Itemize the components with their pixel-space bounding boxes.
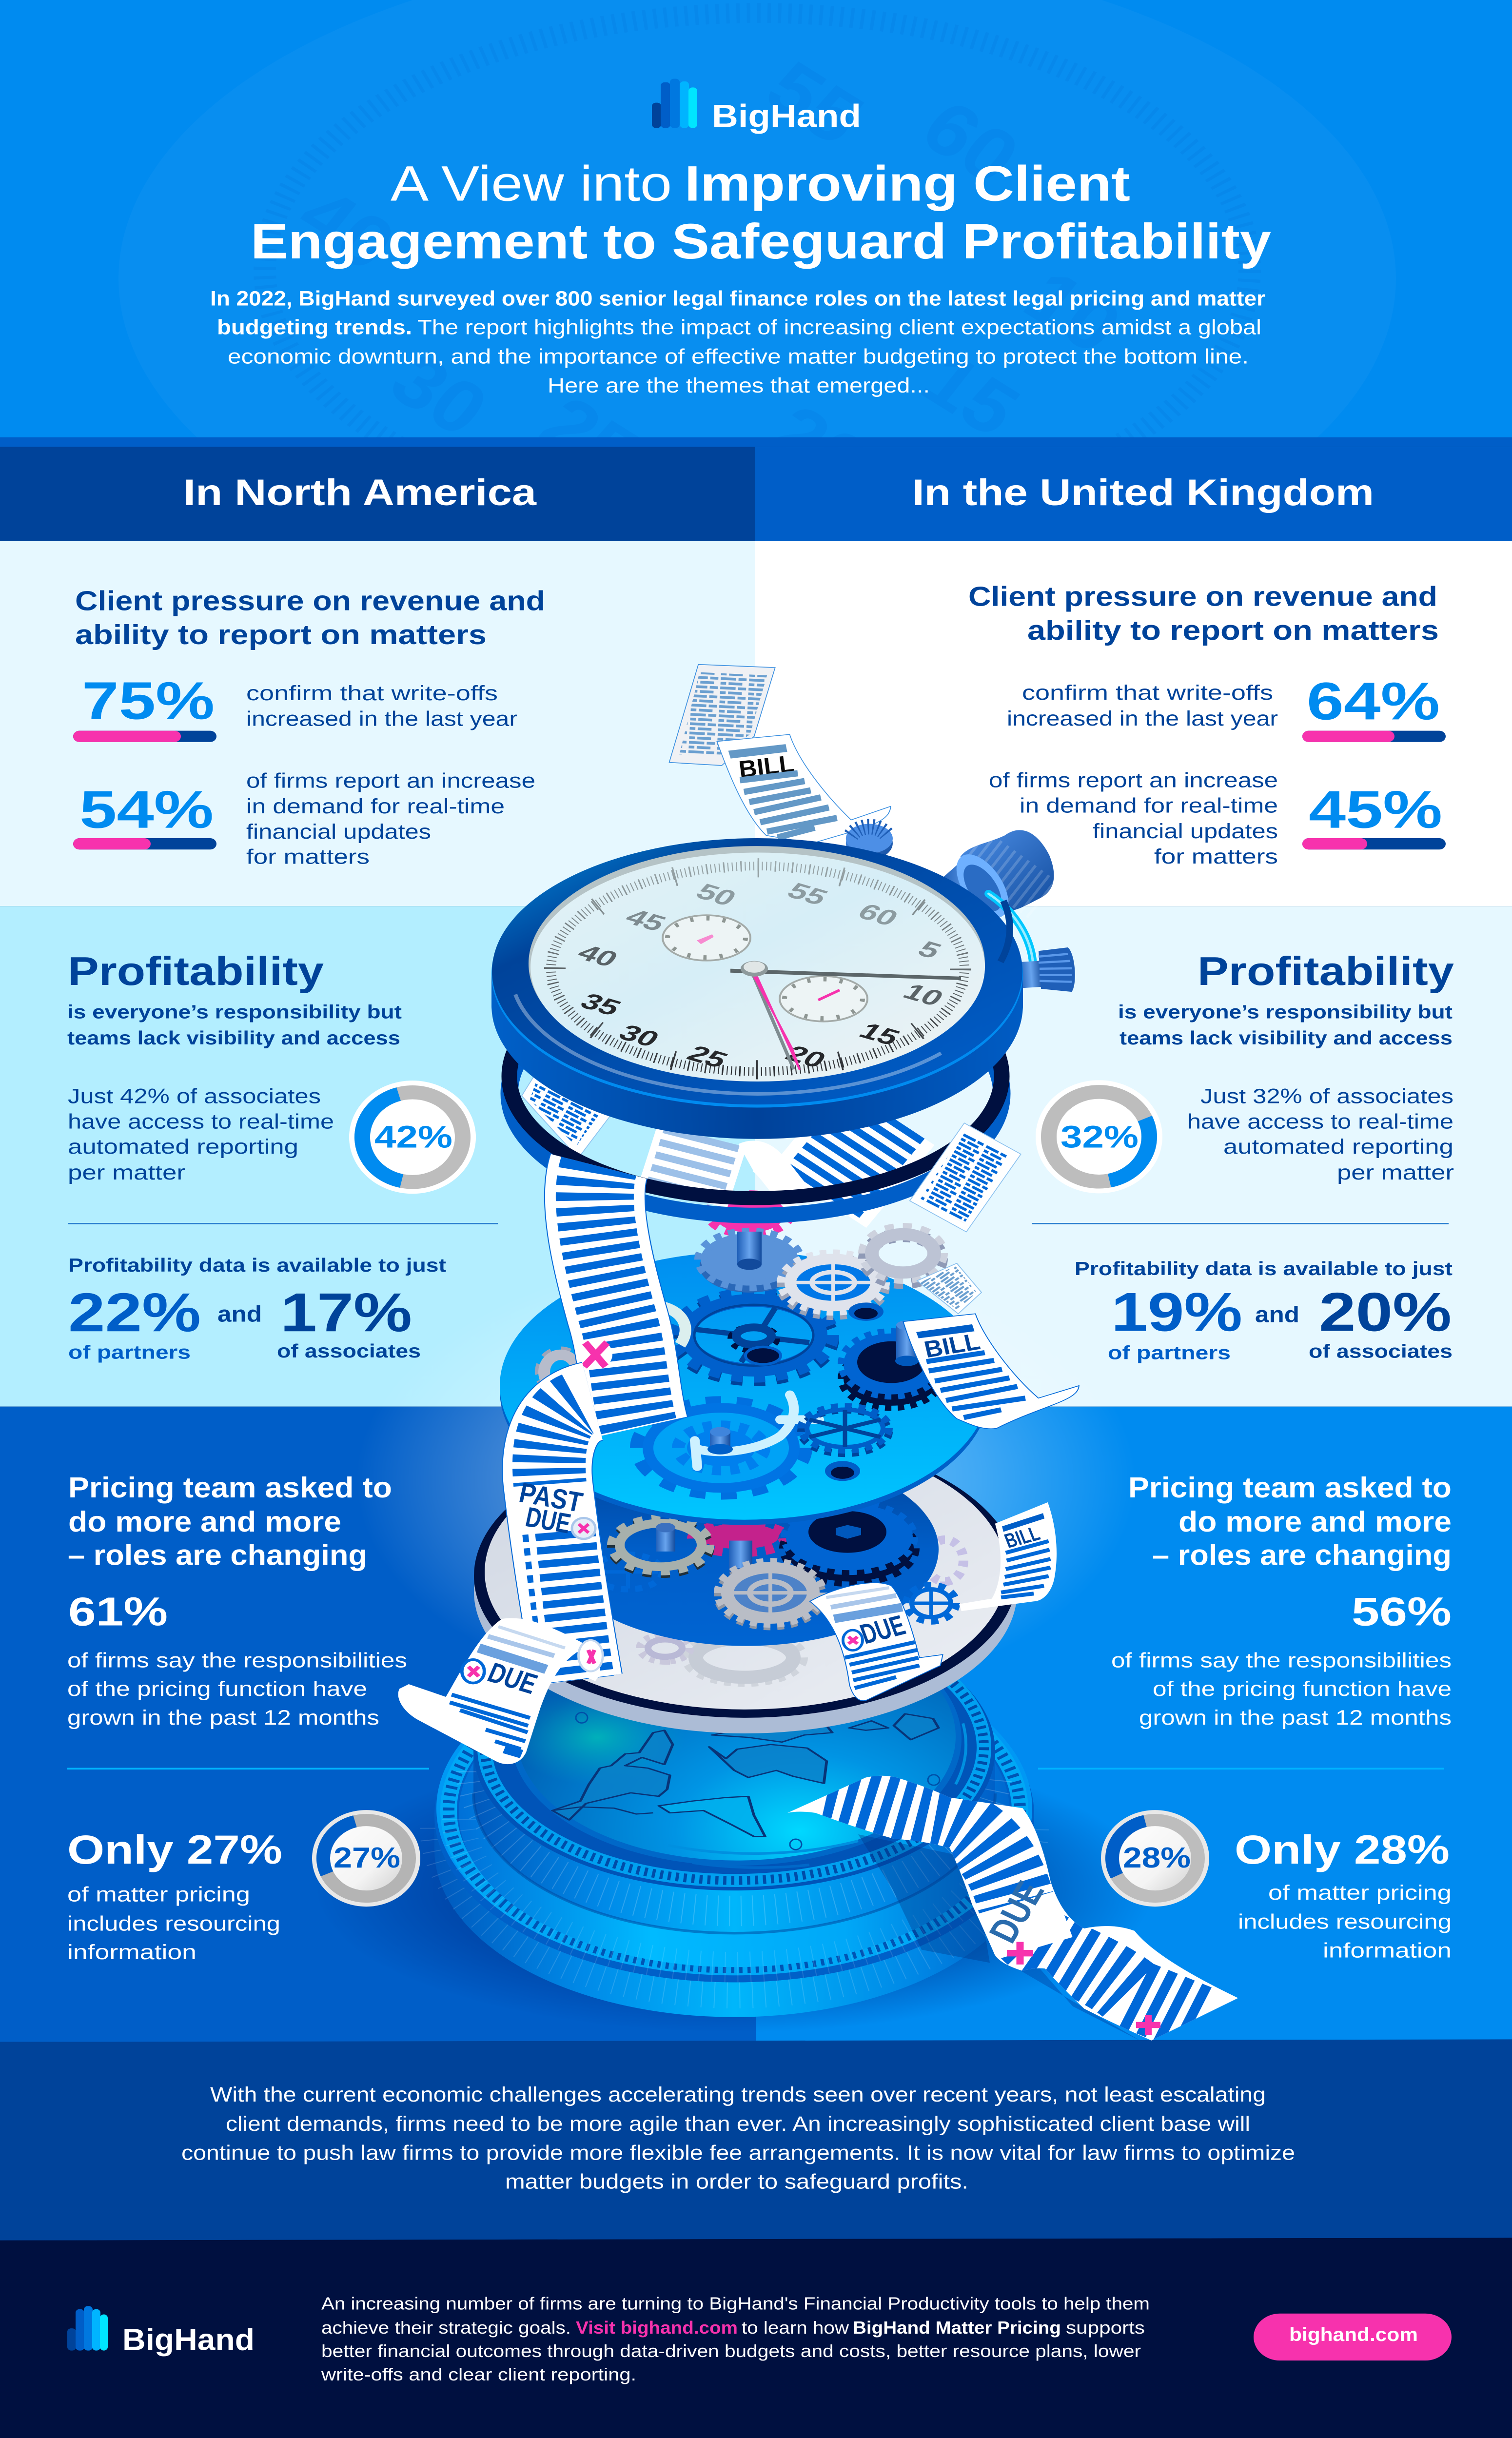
bar 64%: [1302, 731, 1446, 742]
background: header: 20: [755, 390, 884, 504]
stat 19% partners: of partners: [1108, 1342, 1231, 1363]
hole: [848, 1302, 884, 1321]
peg: [707, 1427, 733, 1455]
footer text: BigHand Matter Pricing: [853, 2319, 1061, 2338]
text responsibilities: grown in the past 12 months: [67, 1706, 379, 1730]
closing paragraph: client demands, firms need to be more agile than ever. An increasingly sophisticated client base will: [226, 2112, 1250, 2135]
dial numbers: 20: [780, 1041, 832, 1073]
closing paragraph: With the current economic challenges accelerating trends seen over recent years, not least escalating: [210, 2083, 1266, 2106]
gear: blue top: [700, 1232, 799, 1293]
footer text: better financial outcomes through data-driven budgets and costs, better resource plans, lower: [321, 2342, 1141, 2361]
donut 32%: [1036, 1080, 1162, 1193]
heading: In the United Kingdom: In the United Kingdom: [912, 472, 1374, 513]
intro text: economic downturn, and the importance of effective matter budgeting to protect the bottom line.: [228, 345, 1249, 368]
stat 61%: 61%: [68, 1590, 168, 1634]
donut 32%: 32%: [1060, 1120, 1139, 1155]
stat 54%: 54%: [79, 780, 214, 839]
intro text: budgeting trends.: [217, 315, 412, 339]
heading: [968, 581, 1439, 646]
stat 20% associates: [1309, 1282, 1453, 1362]
text: DUE: DUE: [981, 1875, 1053, 1949]
background: header: 55: [750, 45, 879, 160]
text real-time demand: [989, 768, 1278, 868]
intro text: Here are the themes that emerged...: [548, 374, 930, 397]
background: header: 30: [375, 337, 504, 452]
stat 17% associates: [277, 1282, 421, 1361]
intro text: In 2022, BigHand surveyed over 800 senior legal finance roles on the latest legal pricing and matter: [210, 287, 1265, 310]
donut 27%: 27%: [334, 1842, 400, 1874]
title: Engagement to Safeguard Profitability: [251, 214, 1271, 269]
text 42% associates: [68, 1084, 334, 1184]
icon: plus: [1136, 2015, 1160, 2035]
dial numbers: 40: [572, 940, 624, 972]
footer text: supports: [1066, 2319, 1145, 2338]
footer text: to learn how: [742, 2319, 849, 2338]
heading: Client pressure on revenue and: [75, 585, 545, 616]
heading: Client pressure on revenue and: [968, 581, 1437, 612]
dial numbers: 45: [620, 904, 671, 936]
text real-time demand: financial updates: [1093, 819, 1278, 843]
paper: flying BILL: [717, 734, 891, 843]
dial numbers: 5: [912, 937, 947, 963]
stat 64%: 64%: [1307, 671, 1440, 731]
text responsibilities: [1111, 1649, 1452, 1730]
dial numbers: 10: [898, 980, 949, 1011]
title: A View into: [391, 156, 672, 211]
text 42% associates: automated reporting: [68, 1135, 298, 1159]
dial numbers: 50: [690, 879, 742, 911]
text real-time demand: [246, 769, 535, 868]
panel: UK profitability: [1032, 949, 1454, 1363]
text write-offs: confirm that write-offs: [1022, 681, 1273, 705]
panel: North America pricing team: [67, 1472, 429, 1770]
stat 19% partners: 19%: [1111, 1282, 1242, 1343]
stat 75%: 75%: [82, 671, 215, 730]
text real-time demand: for matters: [246, 845, 370, 868]
bar 75%: [73, 731, 216, 742]
icon: plus: [1007, 1942, 1033, 1965]
text real-time demand: of firms report an increase: [989, 768, 1278, 792]
side pusher: [1018, 947, 1075, 992]
panel: North America client pressure: [73, 585, 545, 868]
paper: flying document: [669, 665, 775, 766]
stat 17% associates: 17%: [280, 1282, 412, 1343]
paper: DUE strip center: DUE: [856, 1610, 909, 1650]
stat only 28%: information: [1323, 1939, 1452, 1962]
gear: dark right with peg: [844, 1320, 939, 1406]
heading: [1128, 1472, 1452, 1572]
background: header: 15: [906, 337, 1035, 452]
subdial lower: [780, 976, 867, 1022]
paper: long DUE strip bottom: [787, 1776, 1238, 2041]
text write-offs: confirm that write-offs: [246, 681, 498, 705]
and: and: [1255, 1302, 1299, 1327]
background: header: 25: [526, 381, 655, 495]
panel: UK pricing team: [1038, 1472, 1452, 1770]
text real-time demand: for matters: [1154, 845, 1278, 868]
dial numbers: 25: [682, 1041, 733, 1073]
donut 42%: [349, 1081, 476, 1194]
stat 22% partners: of partners: [68, 1341, 191, 1363]
intro text: The report highlights the impact of increasing client expectations amidst a global: [417, 315, 1261, 339]
heading: [68, 1472, 392, 1572]
stat only 27%: [67, 1827, 282, 1964]
stat 45%: 45%: [1309, 780, 1442, 839]
title: Improving Client: [685, 156, 1130, 211]
heading: In North America: In North America: [183, 472, 537, 513]
text profitability data: Profitability data is available to just: [68, 1254, 446, 1276]
donut 28%: 28%: [1123, 1842, 1191, 1874]
gear: small spoked left: [594, 1554, 662, 1590]
subheading: teams lack visibility and access: [67, 1027, 400, 1049]
heading: ability to report on matters: [75, 619, 487, 650]
paper: PAST DUE strip: [516, 1401, 595, 1680]
stat only 27%: includes resourcing: [67, 1912, 280, 1935]
dial numbers: 55: [782, 878, 833, 910]
illustration: globe coin stack: [434, 1611, 1034, 2017]
footer text: achieve their strategic goals.: [321, 2319, 571, 2338]
text 32% associates: have access to real-time: [1187, 1110, 1453, 1133]
subheading: [1118, 1001, 1453, 1049]
stat only 28%: Only 28%: [1235, 1827, 1450, 1872]
stat 20% associates: 20%: [1319, 1282, 1452, 1343]
second hand pink: [753, 975, 800, 1070]
gear: pink lower: [693, 1525, 786, 1552]
gear: dark spoked big: [675, 1294, 833, 1380]
gear: small spoked on plate: [906, 1585, 957, 1622]
text real-time demand: financial updates: [246, 820, 431, 843]
heading: Profitability: [1198, 949, 1454, 994]
heading: – roles are changing: [1152, 1539, 1452, 1572]
dial ticks: [551, 866, 964, 1071]
closing paragraph: [181, 2083, 1295, 2193]
subheading: is everyone’s responsibility but: [1118, 1001, 1453, 1022]
text write-offs: increased in the last year: [246, 707, 517, 730]
text 42% associates: Just 42% of associates: [68, 1084, 321, 1108]
text 32% associates: Just 32% of associates: [1200, 1084, 1453, 1108]
coin shadow: [315, 1745, 1154, 2032]
dial numbers: [572, 878, 949, 1073]
stat only 28%: of matter pricing: [1268, 1881, 1452, 1904]
stat 20% associates: of associates: [1309, 1340, 1453, 1362]
stat only 27%: of matter pricing: [67, 1883, 250, 1906]
gear: embossed pale blue: [637, 1403, 805, 1493]
text: PAST DUE: [516, 1476, 586, 1539]
closing paragraph: matter budgets in order to safeguard profits.: [505, 2170, 968, 2193]
gear: target gray lower: [720, 1563, 821, 1625]
text profitability data: Profitability data is available to just: [1075, 1258, 1453, 1279]
gear: gray ring: [866, 1230, 940, 1282]
paper: BILL strip on disc: BILL: [922, 1328, 982, 1363]
heading: Pricing team asked to: [1128, 1472, 1452, 1504]
bezel highlight: [515, 994, 941, 1094]
donut 27%: [312, 1810, 420, 1907]
footer text: Visit bighand.com: [576, 2319, 738, 2338]
text responsibilities: of firms say the responsibilities: [67, 1649, 407, 1672]
pivot: [741, 961, 768, 977]
text real-time demand: of firms report an increase: [246, 769, 535, 792]
ghost gears on plate: [641, 1540, 963, 1680]
donut 42%: 42%: [374, 1120, 452, 1155]
stat 56%: 56%: [1352, 1590, 1452, 1634]
peg: [729, 1541, 752, 1578]
watch side: [491, 971, 1023, 1139]
heading: ability to report on matters: [1027, 615, 1439, 646]
text write-offs: [1007, 681, 1278, 730]
text write-offs: [246, 681, 517, 730]
heading: [75, 585, 545, 650]
donut 28%: [1101, 1810, 1209, 1907]
paper: small doc: [917, 1263, 982, 1314]
bezel: [491, 840, 1023, 1108]
heading: Pricing team asked to: [68, 1472, 392, 1504]
text 32% associates: automated reporting: [1223, 1135, 1453, 1159]
and: and: [217, 1301, 262, 1327]
title: [251, 156, 1271, 269]
paper: BILL strip on disc: [903, 1314, 1079, 1429]
text 42% associates: have access to real-time: [68, 1110, 334, 1133]
illustration: upper gear disc: [500, 1196, 989, 1525]
text write-offs: increased in the last year: [1007, 707, 1278, 730]
gear: pale crescent: [695, 1395, 819, 1467]
illustration: ring under watch: [509, 954, 1001, 1216]
top pusher: [846, 824, 893, 860]
dial numbers: 35: [575, 989, 627, 1021]
panel: UK client pressure: [968, 581, 1446, 868]
subdial upper: [663, 915, 750, 961]
text: PAST DUE: PAST: [516, 1476, 586, 1518]
logo: BigHand header: BigHand: [712, 98, 861, 134]
text responsibilities: [67, 1649, 407, 1730]
stat 19% partners: [1108, 1282, 1242, 1363]
illustration: stopwatch: [491, 824, 1075, 1139]
stat only 28%: includes resourcing: [1238, 1910, 1452, 1933]
text real-time demand: in demand for real-time: [1020, 794, 1278, 817]
gear: pale left: [658, 1306, 686, 1345]
illustration glow: [356, 1254, 1136, 1706]
bar 45%: [1302, 838, 1446, 849]
minute hand: [731, 970, 960, 979]
stat only 27%: Only 27%: [67, 1827, 282, 1872]
text responsibilities: of the pricing function have: [67, 1677, 367, 1701]
panel: North America profitability: [67, 949, 498, 1363]
paper: document right of ring: [910, 1123, 1021, 1232]
subheading: teams lack visibility and access: [1119, 1027, 1453, 1049]
logo: BigHand footer: [67, 2306, 255, 2357]
paper: BILL strip right: BILL: [1001, 1522, 1043, 1553]
paper: DUE strip left: [398, 1618, 603, 1764]
button: bighand.com: [1254, 2314, 1452, 2360]
text 42% associates: per matter: [68, 1160, 185, 1184]
gear: pink top: [710, 1196, 788, 1233]
text: PAST DUE: DUE: [523, 1501, 573, 1539]
intro text: [210, 287, 1265, 397]
paper: long strip with pink cross: [579, 1166, 639, 1428]
subheading: is everyone’s responsibility but: [67, 1001, 402, 1022]
background: header: [0, 0, 1512, 447]
text responsibilities: grown in the past 12 months: [1139, 1706, 1452, 1730]
gear: small spoked: [801, 1407, 889, 1454]
gear: dark large lower: [785, 1504, 914, 1581]
dial numbers: 60: [852, 899, 904, 931]
hole: [825, 1461, 860, 1481]
dial numbers: 15: [854, 1019, 905, 1050]
bezel dark arc: [1001, 901, 1010, 962]
text responsibilities: of the pricing function have: [1153, 1677, 1452, 1701]
closing paragraph: continue to push law firms to provide more flexible fee arrangements. It is now vital for law firms to optimize: [181, 2141, 1295, 2164]
text real-time demand: in demand for real-time: [246, 795, 505, 818]
footer text: [321, 2295, 1150, 2385]
stat only 27%: information: [67, 1941, 196, 1964]
stat only 28%: [1235, 1827, 1452, 1962]
heading: Profitability: [68, 949, 324, 994]
peg: [656, 1523, 675, 1552]
crown: [942, 830, 1054, 963]
footer text: write-offs and clear client reporting.: [321, 2365, 636, 2385]
button: bighand.com: bighand.com: [1289, 2323, 1418, 2345]
text responsibilities: of firms say the responsibilities: [1111, 1649, 1452, 1672]
bar 54%: [73, 838, 216, 849]
shadow: strip over coins: [858, 1834, 990, 1963]
background: header: 40: [282, 172, 411, 287]
stat 17% associates: of associates: [277, 1340, 421, 1361]
heading: do more and more: [1178, 1506, 1452, 1538]
gear: gray left behind strip: [542, 1353, 579, 1391]
gear: white target: [783, 1255, 884, 1315]
dial glass: [529, 846, 985, 1081]
text 32% associates: [1187, 1084, 1454, 1184]
gear: gray ring lower: [612, 1519, 709, 1573]
heading: do more and more: [68, 1506, 341, 1538]
illustration: world map: [552, 1714, 939, 1836]
stat 22% partners: 22%: [68, 1282, 201, 1343]
subheading: [67, 1001, 402, 1049]
heading: – roles are changing: [68, 1539, 367, 1572]
dial numbers: 30: [613, 1020, 665, 1052]
paper: BILL strip right: [959, 1502, 1057, 1611]
icon: cross badge: [572, 1518, 595, 1539]
text 32% associates: per matter: [1337, 1160, 1454, 1184]
footer text: An increasing number of firms are turning to BigHand's Financial Productivity tools to help them: [321, 2295, 1150, 2314]
logo: BigHand footer: BigHand: [122, 2323, 255, 2357]
illustration: back strips inside ring: [683, 1114, 887, 1201]
paper: flying BILL: BILL: [737, 749, 796, 783]
illustration: lower white plate with gears: [474, 1434, 1017, 1733]
background: header: 60: [906, 85, 1035, 199]
paper: document in ring left: [522, 1077, 610, 1158]
paper: DUE strip center: [810, 1583, 943, 1701]
paper: DUE strip left: DUE: [483, 1657, 542, 1700]
logo: BigHand header: [652, 79, 861, 134]
background: header: 10: [1009, 255, 1138, 369]
